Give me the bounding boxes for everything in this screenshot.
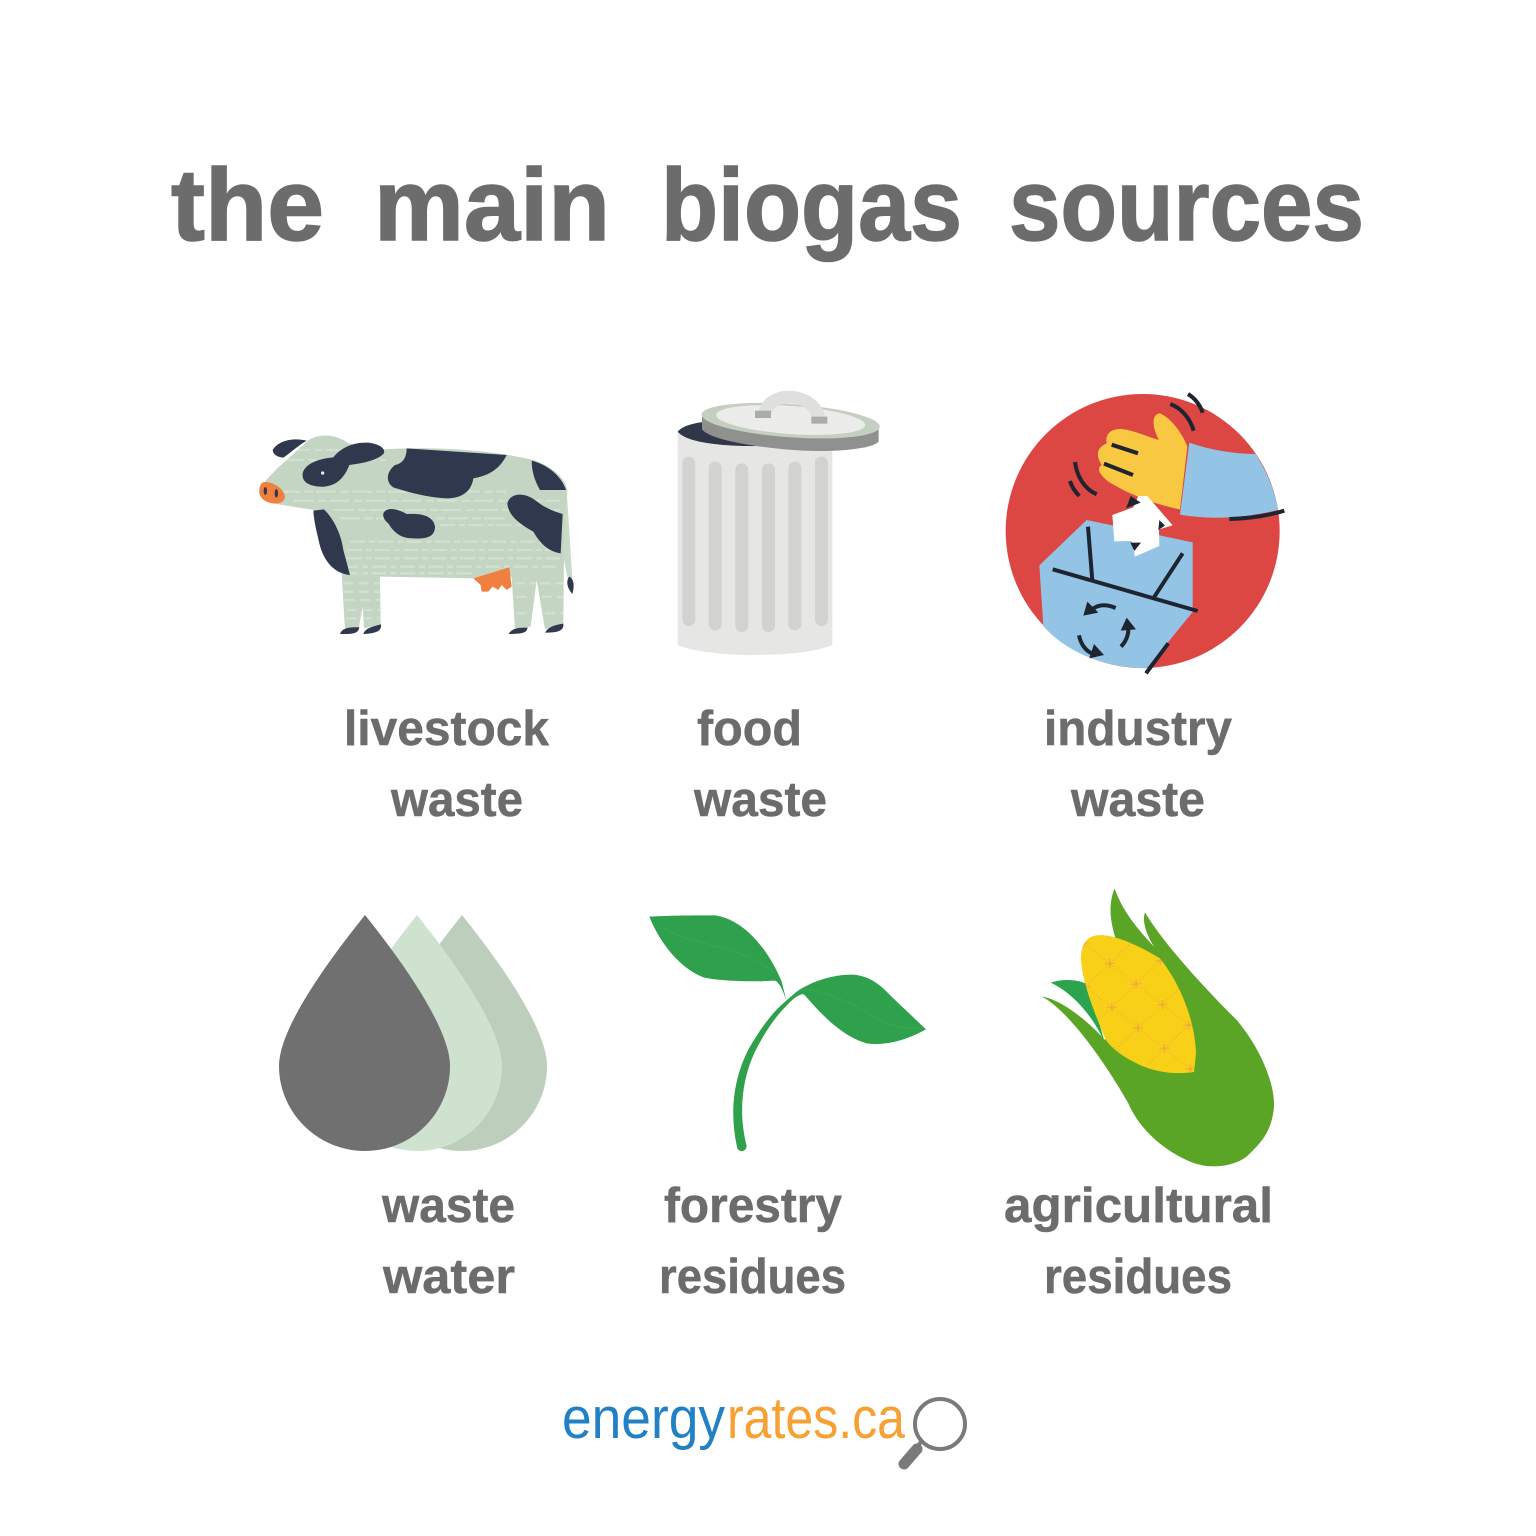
icon: trash can	[678, 397, 881, 655]
label: forestry residues: residues	[659, 1250, 846, 1304]
label: forestry residues	[659, 1179, 846, 1304]
red circle	[1006, 394, 1280, 668]
cob	[1081, 935, 1196, 1073]
paper	[1112, 496, 1173, 557]
title: main	[374, 148, 610, 262]
icon: water drops	[279, 915, 547, 1151]
stem	[733, 992, 805, 1151]
label: industry waste	[1044, 702, 1232, 827]
can ribs	[682, 457, 828, 632]
bin	[1039, 520, 1193, 668]
leaf veins	[663, 928, 923, 1028]
title: the	[171, 148, 324, 262]
label: livestock waste: waste	[390, 773, 523, 827]
dark lines	[1053, 394, 1284, 673]
label: livestock waste: livestock	[344, 702, 550, 756]
label: waste water: water	[382, 1250, 515, 1304]
label: livestock waste	[344, 702, 550, 827]
left leaf	[649, 915, 787, 1002]
back drop	[377, 915, 547, 1151]
lid	[700, 398, 881, 451]
label: food waste	[693, 702, 827, 827]
back husk leaf	[1051, 980, 1105, 1043]
label: food waste: food	[697, 702, 802, 756]
lid handle	[755, 397, 827, 424]
cow texture	[280, 450, 563, 618]
logo: energyrates.ca	[562, 1386, 965, 1464]
title: biogas	[661, 148, 962, 262]
label: industry waste: waste	[1070, 773, 1205, 827]
sleeve	[1180, 443, 1278, 518]
label: industry waste: industry	[1044, 702, 1232, 756]
label: food waste: waste	[693, 773, 827, 827]
front drop	[279, 915, 450, 1151]
hand	[1098, 413, 1187, 509]
label: agricultural residues	[1004, 1179, 1273, 1304]
title: sources	[1009, 148, 1364, 262]
can body	[678, 432, 832, 655]
title	[171, 148, 1364, 262]
cow snout and udder	[259, 482, 285, 504]
cow black spots	[273, 439, 566, 634]
label: agricultural residues: residues	[1044, 1250, 1232, 1304]
logo text	[562, 1386, 906, 1451]
icon: industry waste recycling bin	[1006, 394, 1284, 673]
middle drop	[332, 915, 502, 1151]
label: waste water	[381, 1179, 515, 1304]
husk	[1042, 888, 1274, 1166]
logo text: energy	[562, 1386, 725, 1451]
right leaf	[797, 975, 926, 1044]
icon: corn	[1042, 888, 1274, 1166]
icon: seedling	[649, 915, 926, 1151]
logo text: rates.ca	[727, 1386, 906, 1451]
icon: magnifying glass	[904, 1399, 965, 1464]
label: agricultural residues: agricultural	[1004, 1179, 1273, 1233]
can opening	[678, 422, 760, 446]
label: forestry residues: forestry	[664, 1179, 842, 1233]
label: waste water: waste	[381, 1179, 515, 1233]
cow tail	[563, 490, 572, 578]
icon: cow	[259, 436, 574, 634]
